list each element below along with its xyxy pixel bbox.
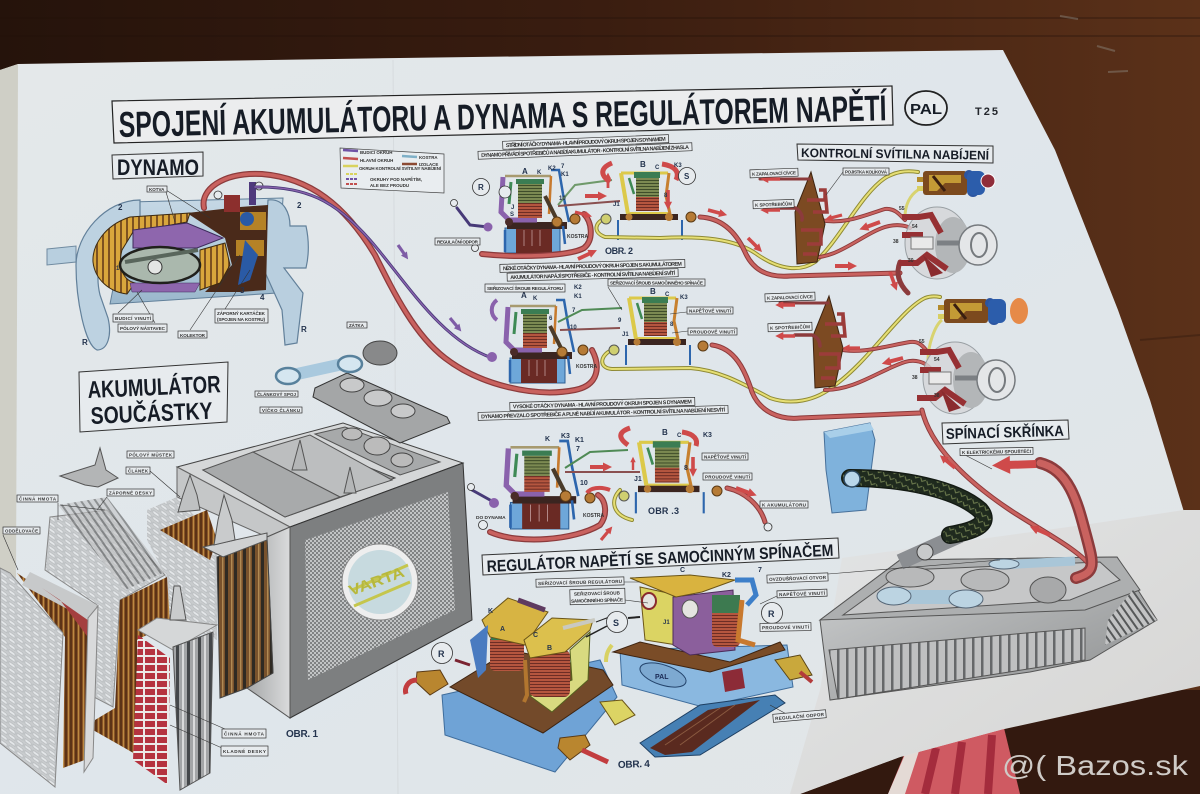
labels: lower lamp circuit: 38: [934, 393, 940, 399]
regulator left view: [405, 598, 635, 772]
control lamp lit: [938, 298, 1028, 325]
sheet number: T25: [975, 106, 998, 118]
dynamo illustration: 4: [260, 293, 265, 302]
wire: purple from dynamo: [255, 187, 492, 358]
heading: regulator napeti: REGULÁTOR NAPĚTÍ SE SAMOČINNÝM SPÍNAČEM: [486, 541, 834, 576]
rim lip: [177, 467, 290, 537]
plate stack back: [45, 510, 165, 707]
marks: low speed: KOSTRA: [576, 364, 598, 370]
yellow field coil: [93, 213, 190, 294]
marks: fig 2: 7: [561, 164, 565, 170]
caption: high speed: [478, 396, 728, 420]
heading: kontrolni svitilna: KONTROLNÍ SVÍTILNA NABÍJENÍ: [801, 145, 990, 163]
battery labels: PÓLOVÝ MŮSTEK: [129, 452, 173, 458]
regulator labels: R: [438, 649, 445, 659]
PAL logo: [905, 91, 947, 125]
dynamo body: [110, 198, 283, 304]
marks: high speed: K3: [561, 433, 570, 440]
marks: low speed: 9: [618, 318, 622, 324]
regulating resistor: [640, 695, 785, 757]
regulator right view: 7: [758, 567, 762, 574]
marks: fig 2: 10: [559, 196, 566, 202]
regulator right view: K2: [722, 572, 731, 579]
label: OBR. 4: OBR. 4: [618, 759, 651, 771]
labels: top lamp circuit: [750, 168, 918, 264]
label: OBR. 2: OBR. 2: [605, 246, 633, 256]
labels: lower lamp circuit: K SPOTŘEBIČŮM: [770, 322, 810, 331]
marks: low speed: K3: [680, 295, 688, 301]
labels: low speed: [485, 278, 737, 335]
dynamo labels: KOLEKTOR: [180, 333, 206, 338]
labels: high speed: NAPĚŤOVÉ VINUTÍ: [704, 452, 747, 460]
labels: low speed: NAPĚŤOVÉ VINUTÍ: [689, 306, 732, 314]
caption: low speed: NÍZKÉ OTÁČKY DYNAMA - HLAVNÍ PROUDOVÝ OKRUH SPOJEN S AKUMULÁTOREM: [503, 260, 682, 272]
labels: high speed: K AKUMULÁTORU: [762, 502, 807, 508]
regulator labels: SAMOČINNÉHO SPÍNAČE: [571, 595, 623, 604]
heading: dynamo: DYNAMO: [117, 155, 199, 180]
separator stack: [17, 573, 92, 768]
VARTA badge: VARTA: [347, 564, 407, 600]
dark rotor housing: [187, 205, 268, 292]
commutator: [236, 212, 266, 256]
caption: high speed: DYNAMO PŘEVZALO SPOTŘEBIČE A PLNĚ NABÍJÍ AKUMULÁTOR - KONTROLNÍ SVÍTILNA NABÍJENÍ NESVÍTÍ: [481, 405, 726, 420]
marks: fig 2: K3: [674, 163, 682, 169]
marks: high speed: KOSTRA: [583, 513, 604, 519]
labels: top lamp circuit: 38: [893, 239, 899, 245]
marks: low speed: K1: [574, 294, 582, 300]
labels: lower lamp circuit: 38: [912, 375, 918, 381]
dynamo illustration: 3: [240, 286, 245, 295]
battery labels: ČLÁNEK: [128, 468, 149, 474]
marks: fig 2: 8: [664, 193, 668, 199]
label: k elektrickemu spoustedi: K ELEKTRICKÉMU SPOUŠTĚČI: [962, 447, 1031, 455]
regulator left view: A: [500, 626, 505, 633]
battery labels: ČINNÁ HMOTA: [224, 730, 265, 736]
dynamo illustration: [47, 182, 308, 350]
caption: fig 2: STŘÍDNÍ OTÁČKY DYNAMA - HLAVNÍ PROUDOVÝ OKRUH SPOJEN S DYNAMEM: [506, 135, 666, 149]
switch box: [899, 207, 997, 279]
switch box lower: [917, 342, 1015, 414]
regulator labels: R: [768, 609, 775, 619]
marks: fig 2: J1: [613, 202, 620, 208]
dynamo labels: PÓLOVÝ NÁSTAVEC: [120, 324, 166, 331]
labels: top lamp circuit: 30: [908, 258, 914, 264]
caption: fig 2: [478, 134, 692, 159]
battery case: [820, 557, 1157, 700]
battery labels: ČLÁNKOVÝ SPOJ: [257, 392, 297, 397]
battery cables: [922, 410, 1092, 578]
figure 3: high speed wiring: [468, 396, 808, 542]
dynamo illustration: 2: [118, 203, 123, 212]
marks: high speed: K1: [575, 437, 584, 444]
shaft: [47, 246, 76, 265]
regulator right view: PAL: [655, 674, 669, 681]
labels: top lamp circuit: 55: [899, 206, 905, 212]
case corner: [247, 527, 290, 718]
right end plate: [264, 200, 308, 345]
marks: fig 2: KOSTRA: [567, 234, 588, 240]
battery labels: KLADNÉ DESKY: [223, 747, 266, 754]
marks: high speed: K3: [703, 432, 712, 439]
regulator labels: S: [613, 618, 619, 628]
case front face: [290, 463, 472, 718]
marks: fig 2: A: [522, 167, 528, 176]
dynamo labels: BUDICÍ VINUTÍ: [115, 314, 152, 321]
labels: lower lamp circuit: 54: [934, 357, 940, 363]
pole bridge: [60, 448, 118, 487]
VARTA badge: [342, 544, 418, 620]
battery fins: [829, 628, 1085, 699]
marks: low speed: A: [521, 291, 527, 300]
marks: low speed: 7: [572, 308, 576, 314]
marks: low speed: B: [650, 287, 656, 296]
labels: lower lamp circuit: K ZAPALOVACÍ CÍVCE: [767, 292, 813, 301]
regulator left view: C: [533, 632, 538, 639]
PAL logo: PAL: [910, 101, 942, 118]
dynamo illustration: R: [82, 338, 88, 347]
middle cell: [147, 497, 217, 640]
terminals: [416, 670, 448, 695]
ground strap: [900, 535, 960, 562]
legend: OKRUH KONTROLNÍ SVÍTILNY NABÍJENÍ: [359, 166, 442, 171]
marks: fig 2: [450, 160, 696, 252]
labels: high speed: PROUDOVÉ VINUTÍ: [705, 472, 751, 480]
legend: ALE BEZ PROUDU: [370, 183, 409, 188]
dynamo labels: (SPOJEN NA KOSTRU): [217, 317, 265, 322]
battery labels: VÍČKO ČLÁNKU: [262, 408, 300, 413]
regulator left view: B: [547, 645, 552, 652]
caption: low speed: AKUMULÁTOR NAPÁJÍ SPOTŘEBIČE - KONTROLNÍ SVÍTILNA NABÍJENÍ SVÍTÍ: [510, 269, 676, 281]
dynamo illustration: 2: [297, 201, 302, 210]
marks: high speed: [468, 428, 712, 530]
labels: lower lamp circuit: [765, 292, 940, 399]
terminals: [224, 195, 240, 212]
marks: low speed: C: [665, 292, 670, 298]
heading: akumulator soucastky: [79, 362, 228, 432]
battery labels: ZÁPORNÉ DESKY: [109, 490, 152, 496]
regulator right view: [606, 567, 812, 707]
marks: low speed: 8: [670, 322, 674, 328]
labels: low speed: SEŘIZOVACÍ ŠROUB REGULÁTORU: [487, 284, 564, 292]
title: [112, 86, 893, 145]
labels: lower lamp circuit: 55: [919, 339, 925, 345]
caps: [886, 567, 934, 587]
battery cutaway: [0, 341, 472, 790]
wire: main red from dynamo: [204, 174, 597, 392]
marks: high speed: C: [677, 433, 682, 439]
red positive plate: [133, 635, 170, 785]
fuse plate: [795, 172, 827, 264]
labels: top lamp circuit: K SPOTŘEBIČŮM: [755, 199, 792, 208]
cell lid: [313, 373, 450, 443]
label: OBR. 1: OBR. 1: [286, 729, 318, 740]
dynamo labels: ZÁPORNÝ KARTÁČEK: [217, 310, 266, 316]
labels: low speed: PROUDOVÉ VINUTÍ: [690, 328, 736, 334]
labels: top lamp circuit: POJISTKA KOLÍKOVÁ: [845, 168, 888, 174]
fuse plate lower: [813, 296, 845, 388]
marks: low speed: K2: [574, 285, 582, 291]
dynamo illustration: R: [301, 325, 307, 334]
marks: high speed: 10: [580, 480, 588, 487]
red roll under poster: [888, 728, 1020, 794]
marks: low speed: [521, 285, 688, 370]
labels: top lamp circuit: K ZAPALOVACÍ CÍVCE: [752, 168, 796, 177]
marks: low speed: J1: [622, 332, 629, 338]
marks: fig 2: K1: [561, 172, 569, 178]
chassis block with braid: [824, 423, 984, 535]
marks: fig 2: C: [655, 165, 660, 171]
brown separator: [93, 577, 170, 755]
regulator labels: SEŘIZOVACÍ ŠROUB REGULÁTORU: [538, 577, 623, 586]
marks: fig 2: K: [537, 170, 542, 176]
legend: [340, 148, 444, 193]
regulator labels: REGULAČNÍ ODPOR: [775, 710, 825, 721]
heading: spinaci skrinka: SPÍNACÍ SKŘÍNKA: [946, 422, 1064, 443]
marks: high speed: 8: [684, 465, 688, 472]
regulator labels: [432, 560, 1000, 722]
marks: fig 2: J: [511, 205, 514, 211]
regulator labels: NAPĚŤOVÉ VINUTÍ: [779, 589, 826, 597]
marks: fig 2: K2: [548, 166, 556, 172]
dynamo labels: KOTVA: [149, 187, 165, 192]
battery on chassis: [820, 535, 1157, 700]
figure 2: middle speed wiring: [435, 134, 918, 268]
regulator left view: K: [488, 608, 493, 615]
dynamo illustration: 1: [116, 266, 120, 272]
labels: low speed: SEŘIZOVACÍ ŠROUB SAMOČINNÉHO SPÍNAČE: [610, 278, 703, 286]
charging lamp circuit, top: [700, 168, 997, 293]
legend: HLAVNÍ OKRUH: [360, 158, 393, 163]
heading: akumulator soucastky: SOUČÁSTKY: [90, 397, 213, 430]
watermark: @( Bazos.sk: [1002, 750, 1189, 781]
regulator labels: PROUDOVÉ VINUTÍ: [762, 623, 810, 630]
link: [288, 362, 352, 376]
figure low speed wiring: [485, 260, 940, 402]
case top rim: [177, 423, 463, 527]
battery labels: ČINNÁ HMOTA: [19, 496, 57, 502]
caption: low speed: [500, 260, 685, 281]
regulator right view: C: [680, 567, 685, 574]
marks: high speed: 7: [576, 446, 580, 453]
battery labels: ODDĚLOVAČE: [5, 528, 38, 534]
labels: top lamp circuit: 54: [912, 224, 918, 230]
label: OBR. 3: OBR .3: [648, 506, 679, 516]
legend: BUDICÍ OKRUH: [360, 150, 392, 155]
charging lamp circuit, lower: [712, 292, 1028, 418]
label: k elektrickemu spoustedi: [960, 447, 1033, 469]
legend: IZOLACE: [419, 162, 438, 167]
legend: OKRUHY POD NAPĚTÍM,: [370, 177, 422, 182]
marks: high speed: B: [662, 428, 668, 437]
marks: high speed: J1: [634, 476, 642, 483]
marks: fig 2: S: [684, 172, 690, 181]
label: regulacni odpor fig 2: REGULAČNÍ ODPOR: [437, 238, 479, 244]
battery labels: ZÁTKA: [349, 323, 365, 328]
control lamp: [917, 170, 985, 197]
labels: high speed: [702, 452, 808, 531]
marks: fig 2: B: [640, 160, 646, 169]
marks: fig 2: S: [510, 212, 514, 218]
label: regulacni odpor fig 2: [435, 238, 480, 245]
marks: low speed: 10: [570, 325, 577, 331]
dynamo labels: [113, 186, 268, 338]
regulator labels: SEŘIZOVACÍ ŠROUB: [574, 588, 621, 597]
front plate: [0, 568, 63, 787]
caption: fig 2: DYNAMO PŘÍVÁDÍ SPOTŘEBIČŮ A NABÍJÍ AKUMULÁTOR - KONTROLNÍ SVÍTILNA NABÍJENÍ ZHASLA: [481, 143, 689, 159]
marks: fig 2: R: [478, 183, 484, 192]
top rings: [342, 428, 362, 440]
left end plate: [76, 200, 140, 350]
regulator right view: J1: [663, 620, 670, 626]
terminal posts: [178, 475, 200, 512]
battery labels: [3, 322, 367, 756]
marks: low speed: K: [533, 296, 538, 302]
plug: [363, 341, 397, 365]
heading: akumulator soucastky: AKUMULÁTOR: [87, 370, 221, 404]
marks: high speed: K: [545, 436, 550, 443]
caption: high speed: VYSOKÉ OTÁČKY DYNAMA - HLAVNÍ PROUDOVÝ OKRUH SPOJEN S DYNAMEM: [513, 397, 692, 410]
legend: KOSTRA: [419, 155, 438, 160]
marks: high speed: DO DYNAMA: [476, 515, 506, 521]
regulator labels: OVZDUŠŇOVACÍ OTVOR: [769, 573, 827, 582]
marks: low speed: 6: [549, 316, 553, 322]
cell connectors: [888, 590, 966, 604]
